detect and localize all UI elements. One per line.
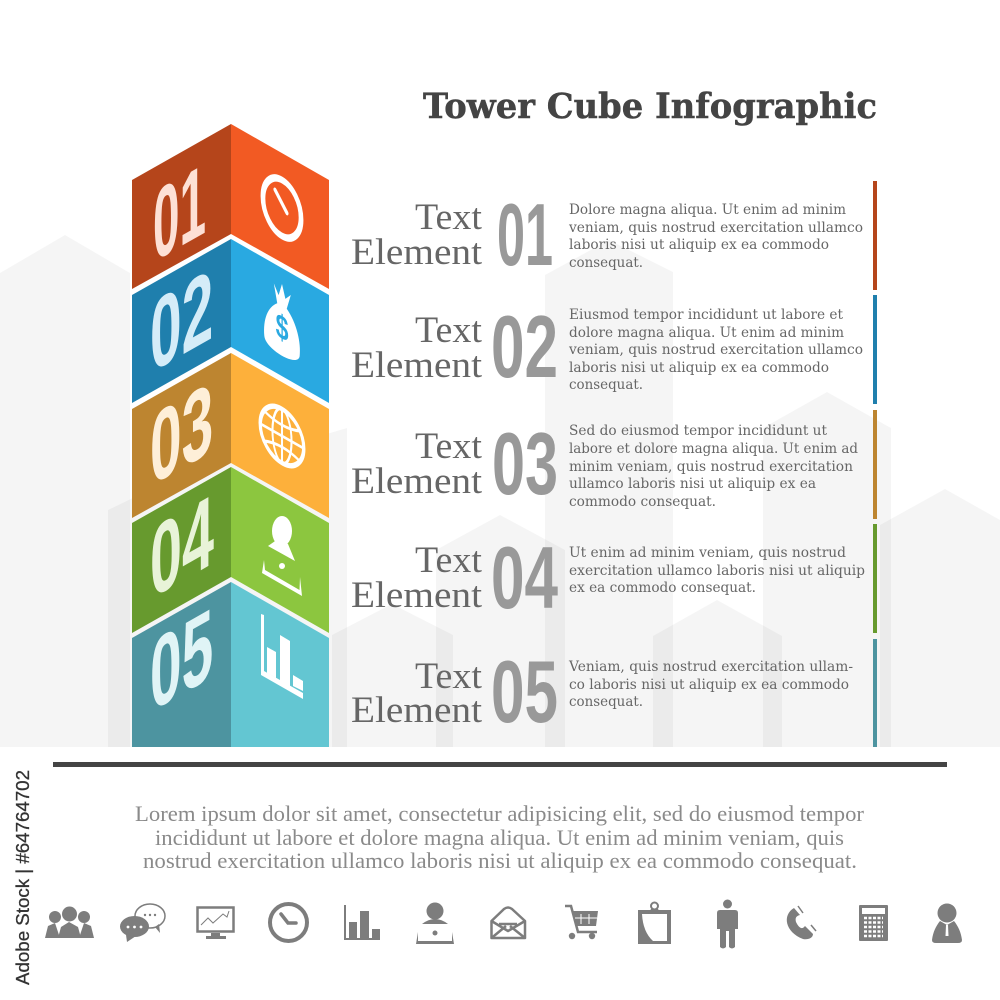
row 02 label: Element (351, 345, 483, 386)
row 05 number: 05 (491, 642, 558, 741)
footer paragraph (135, 801, 865, 873)
icon: standing man (717, 900, 738, 948)
icon: businessman (932, 904, 962, 943)
icon: clipboard (638, 902, 671, 944)
icon: bar chart (344, 905, 380, 940)
row 03 bar (873, 410, 877, 519)
icon: shopping cart (565, 906, 598, 939)
icon: person at laptop (262, 516, 302, 596)
icon: globe (260, 397, 304, 475)
row 01 bar (873, 181, 877, 290)
cube 01: 01 (153, 143, 206, 284)
row 03 label: Text (415, 426, 483, 467)
row 03 text: labore et dolore magna aliqua. Ut enim ad (569, 441, 858, 457)
cube 04 (132, 467, 329, 633)
row 01 text: veniam, quis nostrud exercitation ullamco (568, 220, 863, 236)
row 02 text: consequat. (569, 377, 643, 393)
row 05 label (351, 656, 483, 731)
icon: monitor with chart (198, 908, 234, 939)
icon: telephone (787, 906, 816, 939)
row 02 text: laboris nisi ut aliquip ex ea commodo (569, 360, 829, 376)
row 02 (351, 295, 877, 404)
row 01 text: laboris nisi ut aliquip ex ea commodo (569, 237, 829, 253)
icon: person at laptop (416, 902, 454, 944)
cube 04: 04 (150, 474, 214, 621)
row 01 label: Text (415, 197, 483, 238)
row 02 bar (873, 295, 877, 404)
cube 02 (132, 239, 329, 403)
tower (132, 124, 329, 747)
row 04 text (569, 545, 865, 596)
row 02 text: dolore magna aliqua. Ut enim ad minim (569, 325, 844, 341)
row 05 text: co laboris nisi ut aliquip ex ea commodo (569, 677, 849, 693)
row 04 text: ex ea commodo consequat. (569, 580, 756, 596)
row 04 bar (873, 524, 877, 633)
cube 03 (132, 353, 329, 518)
icon: group of people (45, 906, 94, 938)
row 03 text: Sed do eiusmod tempor incididunt ut (569, 423, 827, 439)
icon: bar chart (261, 614, 303, 699)
cube 01 (132, 124, 329, 289)
row 03 text: ullamco laboris nisi ut aliquip ex ea (569, 476, 816, 492)
row 02 text: Eiusmod tempor incididunt ut labore et (569, 307, 843, 323)
row 05 (351, 639, 877, 747)
icon: clock (263, 169, 301, 247)
row 03 text: commodo consequat. (569, 494, 716, 510)
row 04 label (351, 540, 483, 616)
row 05 text (568, 659, 853, 710)
row 05 label: Element (351, 690, 483, 731)
row 03 (351, 410, 877, 519)
row 02 label: Text (415, 310, 483, 351)
icon: money bag: $ (276, 305, 288, 350)
cube 03: 03 (150, 361, 213, 508)
row 05 label: Text (415, 656, 483, 697)
cube 05: 05 (150, 587, 213, 734)
icon: chat bubbles (120, 904, 165, 942)
row 02 label (351, 310, 483, 386)
row 04 text: Ut enim ad minim veniam, quis nostrud (569, 545, 846, 561)
row 05 text: Veniam, quis nostrud exercitation ullam- (568, 659, 853, 675)
row 03 text: minim veniam, quis nostrud exercitation (569, 459, 853, 475)
icon: clock (270, 904, 307, 941)
icon row (45, 900, 962, 948)
row 01 text: Dolore magna aliqua. Ut enim ad minim (569, 202, 846, 218)
row 03 label (351, 426, 483, 502)
row 01 number: 01 (497, 185, 553, 284)
row 04 text: exercitation ullamco laboris nisi ut aliquip (569, 563, 865, 579)
cube 05 (132, 582, 329, 747)
row 01 text: consequat. (569, 255, 643, 271)
cube 02: 02 (150, 248, 213, 395)
title: Tower Cube Infographic (423, 86, 877, 127)
icon: calculator (859, 905, 888, 941)
row 02 text (568, 307, 863, 393)
row 04 label: Text (415, 540, 483, 581)
row 04 label: Element (351, 575, 483, 616)
row 04 (351, 524, 877, 633)
footer paragraph: incididunt ut labore et dolore magna aliqua. Ut enim ad minim veniam, quis (155, 825, 844, 850)
footer paragraph: nostrud exercitation ullamco laboris nisi ut aliquip ex ea commodo consequat. (143, 848, 857, 873)
row 05 bar (873, 639, 877, 747)
stock credit: Adobe Stock | #64764702 (13, 770, 33, 985)
footer paragraph: Lorem ipsum dolor sit amet, consectetur adipisicing elit, sed do eiusmod tempor (135, 801, 865, 826)
row 03 number: 03 (492, 414, 558, 513)
row 03 label: Element (351, 461, 483, 502)
row 01 (351, 181, 877, 290)
row 05 text: consequat. (569, 694, 643, 710)
row 01 label (351, 197, 483, 273)
icon: money bag (264, 274, 300, 366)
icon: open envelope (492, 908, 525, 938)
row 02 text: veniam, quis nostrud exercitation ullamco (568, 342, 863, 358)
row 01 text (568, 202, 863, 271)
row 04 number: 04 (491, 528, 558, 627)
row 03 text (569, 423, 858, 510)
row 02 number: 02 (491, 297, 558, 396)
background skyline (0, 235, 1000, 747)
row 01 label: Element (351, 232, 483, 273)
